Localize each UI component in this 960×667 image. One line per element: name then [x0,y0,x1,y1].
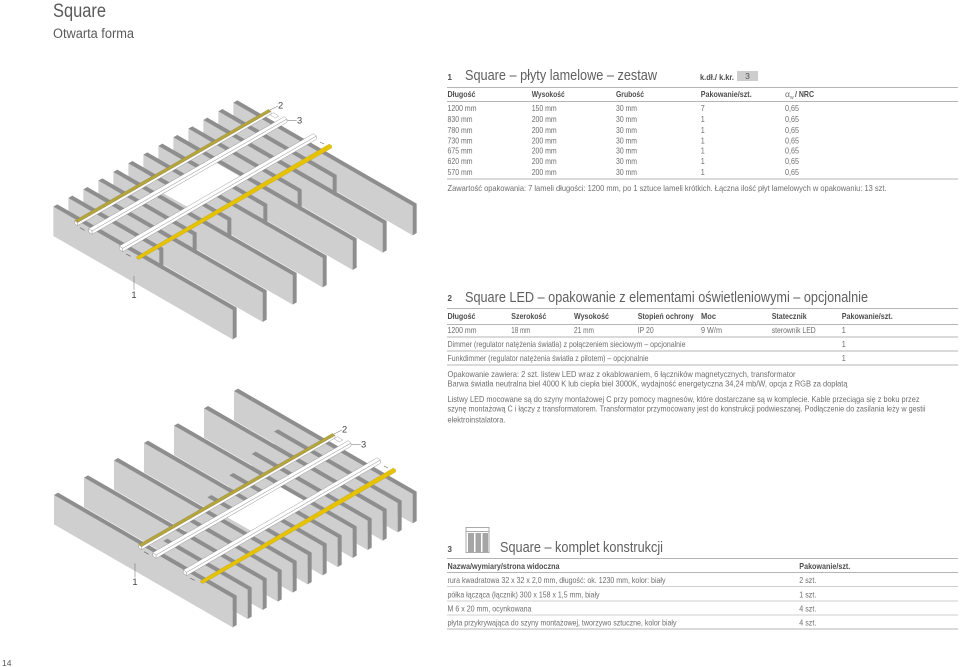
table 1: 0,65 [785,156,799,166]
section 2: LED package [447,289,958,424]
section 2 description [448,369,926,424]
table 2: Moc [701,311,716,321]
table 2: Dimmer (regulator natężenia światła) z połączeniem sieciowym – opcjonalnie [448,339,686,349]
table 1: 30 mm [616,167,637,177]
table 1: 30 mm [616,156,637,166]
table 2: IP 20 [638,325,654,335]
diagram: ceiling with long slats and rails: 3 [297,116,302,126]
table 1: 1 [701,146,705,156]
table 1: 1 [701,114,705,124]
table 1: 200 mm [532,114,557,124]
section 2 description: Opakowanie zawiera: 2 szt. listew LED wraz z okablowaniem, 6 łączników magnetycznych, transformator [448,369,796,379]
table 1: Pakowanie/szt. [701,89,752,99]
table 1: Długość [448,89,476,99]
table 1: 1200 mm [448,103,476,113]
table 2: 1 [842,325,846,335]
table 1: 30 mm [616,103,637,113]
table 3: 1 szt. [799,589,816,599]
table 2: Pakowanie/szt. [842,311,893,321]
diagram: ceiling with alternating slats and rails: 3 [361,440,366,450]
table 3 [447,558,958,629]
section 1 note: Zawartość opakowania: 7 lameli długości: 1200 mm, po 1 sztuce lameli krótkich. Łączna ilość płyt lamelowych w opakowaniu: 13 szt. [448,183,886,193]
table 1: 200 mm [532,156,557,166]
section 3 heading [448,539,663,556]
table 1: 675 mm [448,146,472,156]
table 1: 30 mm [616,114,637,124]
table 1: 30 mm [616,125,637,135]
table 1: 200 mm [532,125,557,135]
table 1: w [790,95,794,101]
page heading: Otwarta forma [53,26,134,41]
table 2: 9 W/m [701,325,722,335]
diagram: ceiling with long slats and rails: 2 [278,101,283,111]
diagram: ceiling with alternating slats and rails: 2 [342,425,347,435]
table 1: 0,65 [785,125,799,135]
section 3 heading: Square – komplet konstrukcji [500,539,663,556]
table 1: 0,65 [785,114,799,124]
table 3: 4 szt. [799,603,816,613]
table 1: Wysokość [532,89,565,99]
table 1: 1 [701,156,705,166]
table 2: 1 [842,353,846,363]
diagram: ceiling with alternating slats and rails [54,389,417,627]
table 1: 780 mm [448,125,472,135]
table 1: Grubość [616,89,644,99]
table 1: 1 [701,125,705,135]
table 1: 200 mm [532,135,557,145]
table 2: Funkdimmer (regulator natężenia światła z pilotem) – opcjonalnie [448,353,649,363]
table 3: Pakowanie/szt. [799,561,850,571]
diagram: ceiling with long slats and rails [53,100,417,339]
table 2: 1200 mm [448,325,476,335]
table 1: 830 mm [448,114,472,124]
k.dl/k.kr badge: k.dł./ k.kr. [700,72,734,82]
section 1 heading: 1 [448,73,452,82]
table 1: 730 mm [448,135,472,145]
section 2 heading: 2 [448,294,452,303]
table 3: 2 szt. [799,575,816,585]
table 3: rura kwadratowa 32 x 32 x 2,0 mm, długość: ok. 1230 mm, kolor: biały [448,575,666,585]
table 1: 1 [701,135,705,145]
section 3: construction kit [447,528,958,629]
table 2: 1 [842,339,846,349]
table 2: sterownik LED [772,325,816,335]
table 1: 0,65 [785,167,799,177]
table 3: M 6 x 20 mm, ocynkowana [448,603,532,613]
section 1 heading: Square – płyty lamelowe – zestaw [465,67,657,84]
table 2: Statecznik [772,311,807,321]
table 3: płyta przykrywająca do szyny montażowej, tworzywo sztuczne, kolor biały [448,617,677,627]
table 3: Nazwa/wymiary/strona widoczna [448,561,560,571]
page heading: Square [53,1,106,22]
table 2: Długość [448,311,476,321]
table 1: 30 mm [616,135,637,145]
k.dl/k.kr badge [700,71,758,82]
table 2: 18 mm [511,325,530,335]
table 2: Wysokość [574,311,609,321]
k.dl/k.kr badge: 3 [745,71,750,81]
table 3: 4 szt. [799,617,816,627]
diagram: ceiling with long slats and rails: 1 [131,290,137,300]
section 3 heading: 3 [448,545,452,554]
table 1: 200 mm [532,167,557,177]
table 1: 1 [701,167,705,177]
section 2 description: Barwa światła neutralna biel 4000 K lub ciepła biel 3000K, wydajność energetyczna 34,24 mb/W, opcja z RGB za dopłatą [448,379,848,389]
table 1: 0,65 [785,146,799,156]
table 2: Szerokość [511,311,547,321]
table 1: 7 [701,103,705,113]
section 1: lamella panels set [447,67,958,193]
table 2 [447,308,958,365]
table 1: 570 mm [448,167,472,177]
section 2 heading: Square LED – opakowanie z elementami oświetleniowymi – opcjonalnie [465,289,868,306]
table 2: Stopień ochrony [638,311,694,321]
table 2: 21 mm [574,325,594,335]
table 1: 620 mm [448,156,472,166]
icon: construction kit [466,528,489,552]
table 1: / NRC [795,89,814,99]
table 1 [447,88,958,179]
section 2 description: elektroinstalatora. [448,414,506,424]
table 1: 30 mm [616,146,637,156]
table 1: 0,65 [785,135,799,145]
table 1: 150 mm [532,103,557,113]
page heading [53,1,134,41]
table 1: 200 mm [532,146,557,156]
diagram: ceiling with alternating slats and rails: 1 [132,577,138,587]
table 1: 0,65 [785,103,799,113]
table 3: półka łącząca (łącznik) 300 x 158 x 1,5 mm, biały [448,589,600,599]
table 1: α [785,89,790,99]
